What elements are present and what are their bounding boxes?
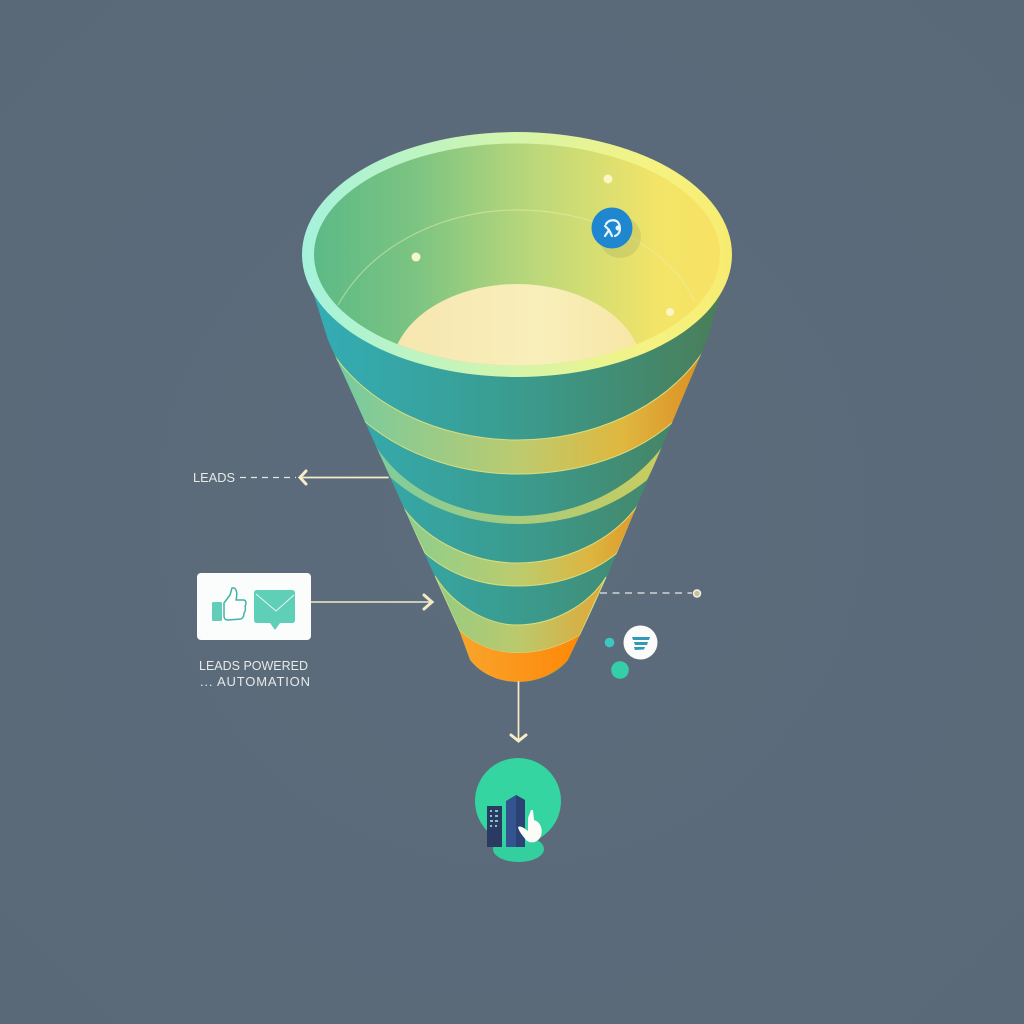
icon: thumbs up bbox=[212, 588, 246, 621]
dot 2 bbox=[412, 252, 420, 262]
green dot bbox=[611, 661, 629, 679]
connector end dot bbox=[694, 590, 700, 597]
band 1 bbox=[330, 349, 705, 474]
leads dashed connector bbox=[240, 476, 296, 478]
arrow: funnel to result bbox=[511, 682, 526, 741]
dot 1 bbox=[604, 174, 612, 184]
card: thumbs up and mail bbox=[197, 573, 311, 640]
band 4 bbox=[435, 576, 606, 653]
caption: leads powered automation: ... AUTOMATION bbox=[200, 674, 310, 689]
funnel body bbox=[314, 293, 721, 682]
orange tip bbox=[459, 630, 580, 682]
dashed connector right bbox=[600, 592, 692, 594]
caption: leads powered automation: LEADS POWERED bbox=[199, 658, 308, 673]
arrow: card to funnel bbox=[311, 595, 432, 609]
caption: leads powered automation bbox=[199, 658, 310, 689]
icon: blue sync badge bbox=[592, 208, 641, 258]
funnel floor bbox=[398, 284, 636, 366]
arrow: funnel to leads bbox=[300, 471, 388, 484]
small teal dot bbox=[605, 638, 614, 647]
funnel interior bbox=[314, 144, 720, 366]
funnel rim bbox=[302, 132, 732, 377]
band 3 bbox=[402, 505, 638, 586]
funnel bbox=[285, 132, 745, 690]
label: LEADS: LEADS bbox=[193, 470, 235, 485]
interior orbit line bbox=[338, 210, 695, 305]
band 2 bbox=[375, 443, 665, 524]
icon: filter badge bbox=[624, 626, 658, 660]
icon: mail bubble bbox=[254, 590, 295, 630]
icon: buildings with pointing hand bbox=[475, 758, 561, 862]
dot 3 bbox=[666, 308, 674, 316]
